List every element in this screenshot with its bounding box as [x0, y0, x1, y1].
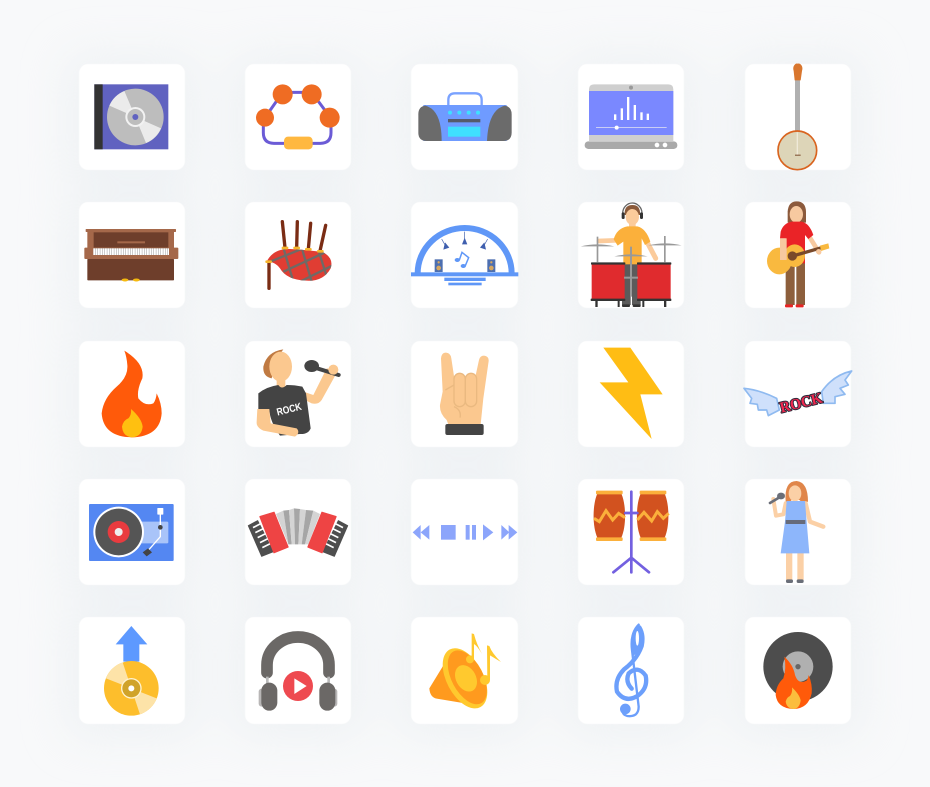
panel: rock singer card	[245, 341, 351, 447]
panel: piano card	[79, 202, 185, 308]
panel: media controls card	[411, 479, 518, 585]
icon: lightning bolt	[600, 348, 663, 439]
panel: guitarist card	[745, 201, 851, 308]
panel: turntable card	[79, 479, 185, 585]
icon: rock hand sign	[440, 353, 489, 435]
panel: concert stage card	[411, 202, 518, 308]
panel: bagpipes card	[245, 202, 351, 308]
panel: rock hand card	[411, 341, 518, 447]
panel: winged rock logo card	[744, 341, 852, 447]
icon: banjo	[778, 64, 817, 170]
panel: boombox card	[411, 64, 518, 170]
panel: conga drums card	[578, 479, 684, 585]
panel: headphones card	[245, 617, 351, 724]
icon: headphones with play button	[259, 637, 337, 711]
icon: upright piano	[84, 229, 178, 281]
panel: CD upload card	[79, 617, 185, 724]
icon: bagpipes	[265, 222, 333, 288]
icon: drummer	[581, 203, 682, 307]
text: ROCK shirt print: ROCK	[276, 402, 303, 419]
panel: banjo card	[745, 64, 851, 170]
panel: burning record card	[745, 617, 851, 724]
panel: lightning bolt card	[578, 341, 684, 447]
icon: guitarist	[767, 201, 829, 307]
panel: treble clef card	[578, 617, 684, 724]
icon: boombox	[418, 93, 512, 141]
panel: laptop card	[578, 64, 684, 170]
icon: tambourine	[256, 84, 340, 149]
panel: flame card	[79, 341, 185, 447]
panel: loudspeaker notes card	[411, 617, 518, 724]
icon: CD case	[94, 84, 168, 149]
panel: CD case card	[79, 64, 185, 170]
panel: accordion card	[245, 479, 351, 585]
panel: drummer card	[578, 202, 684, 308]
panel: female singer card	[745, 479, 851, 585]
icon: CD with upload arrow	[104, 626, 159, 716]
icon: concert stage	[411, 228, 518, 285]
icon: accordion	[248, 508, 348, 556]
icon: laptop audio player	[585, 84, 677, 149]
icon: loudspeaker with music notes	[429, 633, 501, 716]
panel: tambourine card	[245, 64, 351, 170]
icon: treble clef	[616, 624, 646, 716]
icon: flame	[102, 351, 162, 437]
text: ROCK logo: ROCK	[778, 390, 824, 417]
icon: burning vinyl record	[763, 632, 833, 709]
icon: female singer	[770, 481, 823, 583]
icon: turntable	[89, 504, 174, 561]
icon: conga drums	[594, 491, 669, 572]
icon: media player controls	[413, 524, 517, 540]
